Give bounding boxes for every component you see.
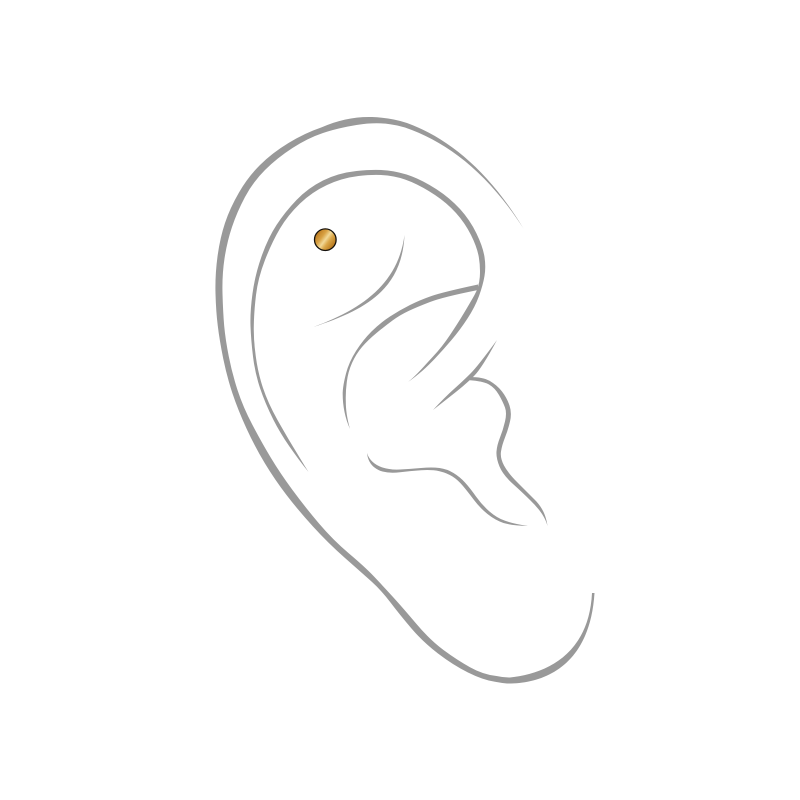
outer ear outline (helix and lobe) (215, 117, 594, 684)
tragus curve (467, 377, 548, 526)
upper fold curve (314, 235, 404, 327)
tragus line (433, 340, 497, 410)
inner ear fold (antihelix) (250, 170, 485, 472)
antitragus curve (367, 453, 528, 526)
crus of helix curve (343, 284, 478, 429)
gold stud earring (314, 229, 336, 250)
